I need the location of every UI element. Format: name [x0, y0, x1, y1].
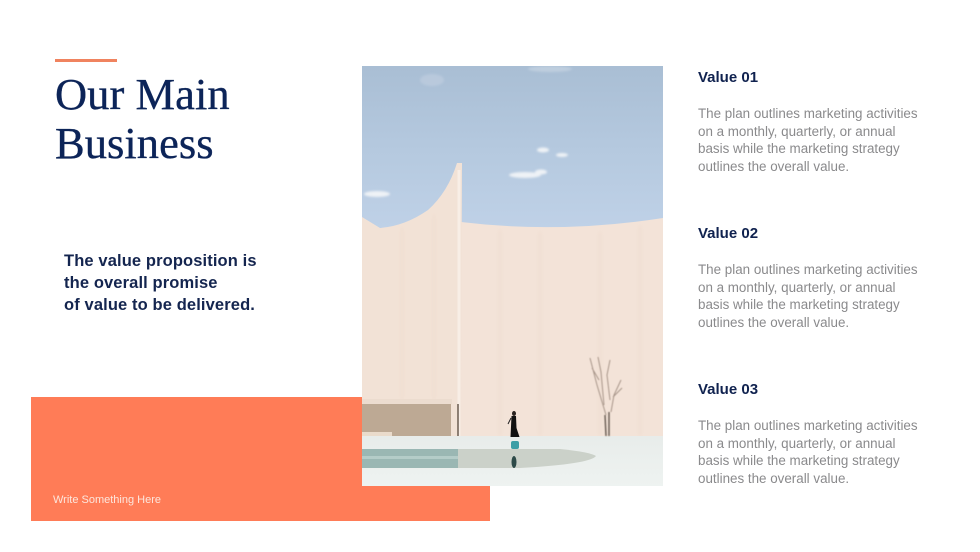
value proposition statement: The value proposition is	[64, 252, 257, 270]
title: Our Main	[55, 69, 230, 119]
value proposition statement	[64, 252, 257, 314]
clouds	[364, 66, 572, 197]
value proposition statement: the overall promise	[64, 274, 218, 292]
value 01	[698, 69, 918, 174]
accent line	[55, 59, 117, 62]
value 03 body: on a monthly, quarterly, or annual	[698, 436, 896, 451]
value 03	[698, 381, 918, 486]
value 01 body: The plan outlines marketing activities	[698, 106, 918, 121]
wall seams	[402, 215, 640, 436]
recessed opening	[362, 403, 451, 438]
value 02 body: The plan outlines marketing activities	[698, 262, 918, 277]
value 02 body: basis while the marketing strategy	[698, 297, 900, 312]
value 01 heading: Value 01	[698, 69, 758, 86]
value 02	[698, 225, 918, 330]
value 02 body	[698, 262, 918, 330]
value 01 body	[698, 106, 918, 174]
title	[55, 69, 230, 168]
figure	[508, 411, 520, 468]
value 02 body: outlines the overall value.	[698, 315, 849, 330]
value 01 body: outlines the overall value.	[698, 159, 849, 174]
photo: architecture with figure and tree	[362, 66, 663, 486]
value 03 body: outlines the overall value.	[698, 471, 849, 486]
pool	[362, 449, 596, 468]
value 02 body: on a monthly, quarterly, or annual	[698, 280, 896, 295]
title: Business	[55, 118, 214, 168]
sky	[362, 66, 663, 236]
value proposition statement: of value to be delivered.	[64, 296, 255, 314]
back wall	[461, 218, 663, 440]
value 01 body: basis while the marketing strategy	[698, 141, 900, 156]
value 03 body: basis while the marketing strategy	[698, 453, 900, 468]
value 03 body: The plan outlines marketing activities	[698, 418, 918, 433]
front wall	[362, 163, 462, 440]
value 01 body: on a monthly, quarterly, or annual	[698, 124, 896, 139]
orange panel caption: Write Something Here	[53, 494, 161, 506]
tree	[590, 357, 622, 436]
value 03 heading: Value 03	[698, 381, 758, 398]
orange panel	[31, 397, 490, 521]
value 03 body	[698, 418, 918, 486]
pool deck	[362, 436, 663, 486]
value 02 heading: Value 02	[698, 225, 758, 242]
